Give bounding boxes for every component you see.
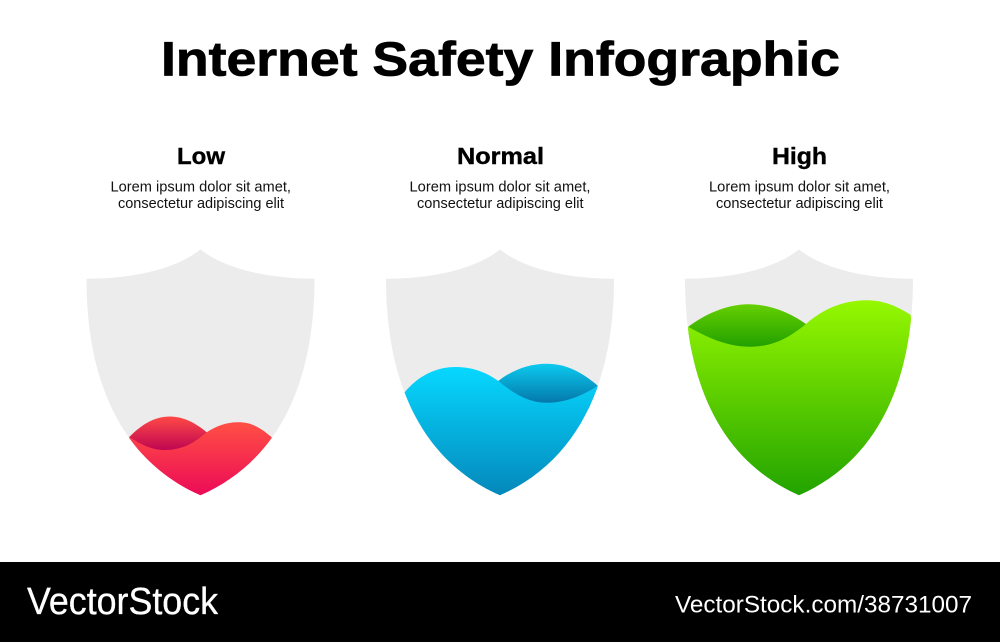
footer bar (0, 562, 1000, 642)
text block: high: consectetur adipiscing elit (716, 196, 883, 212)
heading: normal: Normal (457, 143, 544, 169)
panel: low (86, 143, 314, 500)
text block: high (709, 180, 890, 212)
panel: normal (386, 143, 620, 500)
footer logo text: VectorStock (27, 581, 219, 623)
icon: normal shield (386, 250, 620, 500)
heading: low: Low (177, 143, 225, 169)
text block: normal: consectetur adipiscing elit (417, 196, 584, 212)
footer image id: VectorStock.com/38731007 (675, 592, 972, 618)
text block: normal: Lorem ipsum dolor sit amet, (410, 180, 590, 196)
text block: low (110, 180, 291, 212)
icon: high shield (685, 250, 913, 496)
title: Internet Safety Infographic (161, 34, 840, 87)
text block: low: Lorem ipsum dolor sit amet, (110, 180, 291, 196)
heading: high: High (772, 143, 827, 169)
text block: normal (410, 180, 590, 212)
panel: high (685, 146, 913, 496)
text block: high: Lorem ipsum dolor sit amet, (709, 180, 890, 196)
icon: low shield (86, 250, 314, 500)
text block: low: consectetur adipiscing elit (118, 196, 284, 212)
